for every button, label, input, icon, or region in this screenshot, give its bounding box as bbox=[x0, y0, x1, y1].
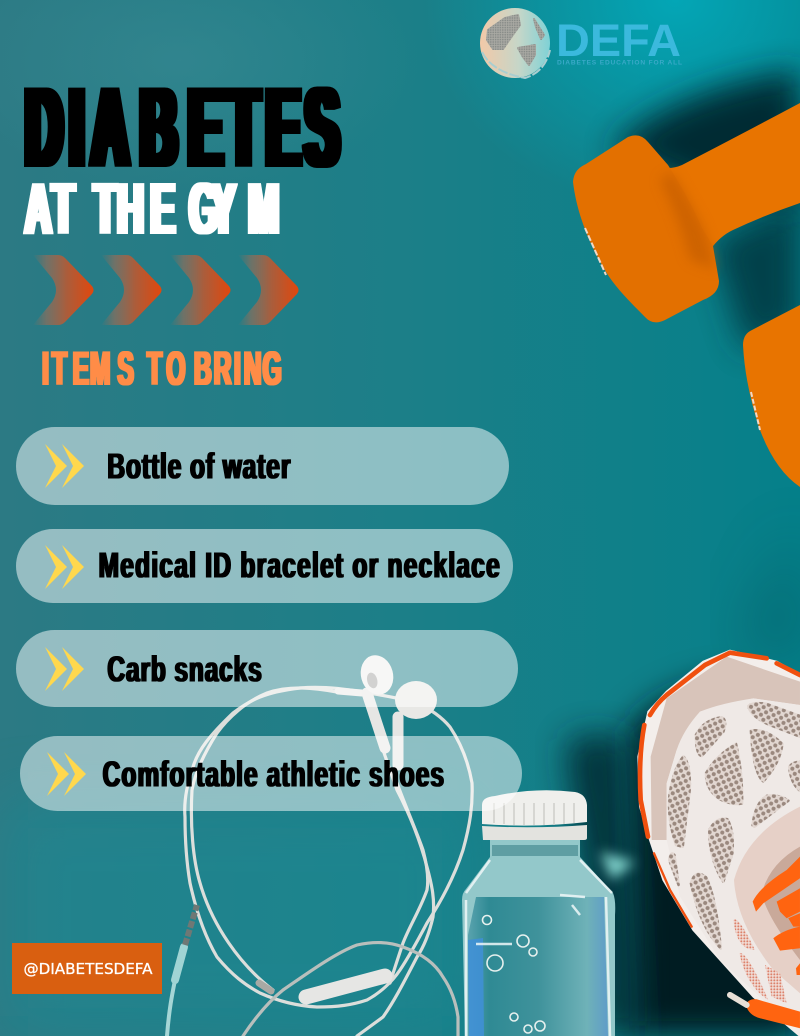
shoe laces bbox=[746, 857, 800, 1028]
mesh vents bbox=[669, 703, 800, 948]
earbud stems bbox=[367, 693, 398, 765]
item: medical id bbox=[16, 529, 513, 603]
item: carb snacks: Carb snacks bbox=[107, 649, 262, 690]
item: bottle of water: Bottle of water bbox=[107, 446, 290, 487]
running shoe bbox=[638, 651, 800, 1036]
item: carb snacks bbox=[16, 630, 518, 707]
dumbbell: upper bbox=[573, 103, 800, 322]
earbud left bbox=[356, 652, 398, 698]
dumbbell: lower bbox=[743, 305, 800, 487]
bottle highlights bbox=[466, 860, 612, 1036]
logo wordmark: DEFA bbox=[556, 15, 681, 66]
item: athletic shoes bbox=[20, 736, 522, 811]
cable splitter bbox=[338, 691, 362, 693]
item: athletic shoes: Comfortable athletic shoes bbox=[103, 754, 444, 795]
lace tip bbox=[730, 995, 747, 1005]
shoe inner band bbox=[651, 657, 800, 840]
cable connector bbox=[259, 983, 271, 991]
chevron row bbox=[33, 255, 298, 325]
jack plug bbox=[175, 947, 184, 980]
bottle neck ring bbox=[482, 825, 587, 840]
earphone cables bbox=[167, 687, 472, 1036]
orange rim bbox=[640, 653, 800, 927]
earphones bbox=[167, 652, 472, 1036]
social handle: @DIABETESDEFA bbox=[24, 960, 153, 978]
subtitle: at the gym: AT THE GYM bbox=[25, 169, 279, 250]
social handle bbox=[12, 943, 162, 994]
water bubbles bbox=[482, 916, 545, 1033]
blue label strip bbox=[468, 938, 484, 1036]
item: medical id: Medical ID bracelet or necklace bbox=[99, 545, 500, 586]
bottle neck shadow bbox=[492, 845, 578, 856]
logo globe bbox=[480, 8, 550, 78]
inline remote bbox=[306, 976, 385, 997]
water bbox=[468, 897, 608, 1036]
logo tagline: DIABETES EDUCATION FOR ALL bbox=[557, 60, 682, 66]
bottle cap bbox=[482, 790, 587, 826]
logo bbox=[480, 8, 682, 78]
title: diabetes: DIABETES bbox=[26, 65, 339, 191]
lace opening bbox=[762, 847, 800, 960]
water bottle bbox=[462, 790, 615, 1036]
item: bottle of water bbox=[16, 427, 509, 505]
mesh panel bbox=[667, 698, 800, 1023]
toe cap panel bbox=[734, 807, 800, 993]
earbud right bbox=[395, 681, 437, 719]
toe vents bbox=[733, 919, 787, 1003]
heading: items to bring: ITEMS TO BRING bbox=[42, 342, 282, 395]
shoe upper bbox=[638, 651, 800, 1036]
bottle body bbox=[462, 840, 615, 1036]
